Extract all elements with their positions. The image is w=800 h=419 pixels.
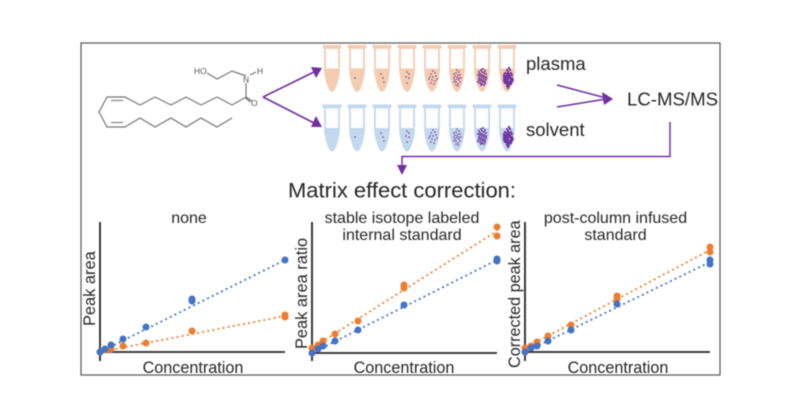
- label: solvent: solvent: [526, 119, 585, 140]
- chart: post-column infused standard: [506, 210, 714, 377]
- plasma tube row: [322, 45, 516, 91]
- label: LC-MS/MS: LC-MS/MS: [627, 88, 718, 110]
- arrow: LC-MS/MS to matrix effect correction: [397, 122, 670, 175]
- chart title: none: none: [171, 210, 207, 227]
- series: orange: [308, 224, 500, 352]
- y axis label: peak area ratio: Peak area ratio: [293, 238, 311, 349]
- series: blue: [96, 256, 288, 356]
- series: orange: [96, 312, 288, 356]
- axes: [525, 222, 710, 361]
- arrow: molecule to plasma tubes: [263, 67, 322, 97]
- icon: lipid molecule structure: N: [243, 74, 249, 84]
- icon: lipid molecule structure: HO: [194, 66, 207, 76]
- x axis label: concentration: Concentration: [143, 359, 243, 377]
- x axis label: concentration: Concentration: [568, 359, 668, 377]
- series: orange: [522, 244, 714, 352]
- axes: [100, 222, 285, 361]
- heading: matrix effect correction: Matrix effect correction:: [288, 180, 516, 202]
- series: blue: [522, 256, 714, 356]
- chart: stable isotope labeled internal standard: [293, 210, 500, 377]
- icon: lipid molecule structure: H: [257, 66, 263, 76]
- arrow: molecule to solvent tubes: [263, 97, 322, 127]
- y axis label: corrected peak area: Corrected peak area: [506, 220, 524, 368]
- label: plasma: plasma: [526, 53, 586, 74]
- series: blue: [308, 256, 500, 356]
- chart: none: [81, 210, 288, 377]
- solvent tube row: [322, 104, 516, 150]
- chart title: post-column infused standard: standard: [584, 227, 647, 244]
- icon: lipid molecule structure: O: [251, 98, 258, 108]
- x axis label: concentration: Concentration: [354, 359, 454, 377]
- chart title: stable isotope labeled internal standard: internal standard: [342, 227, 462, 244]
- chart title: post-column infused standard: post-column infused: [544, 210, 687, 227]
- panel: figure frame: [81, 43, 720, 375]
- chart title: stable isotope labeled internal standard: stable isotope labeled: [325, 210, 479, 227]
- arrow: samples to LC-MS/MS: [557, 85, 613, 107]
- icon: lipid molecule structure: [99, 66, 263, 127]
- axes: [312, 222, 497, 361]
- y axis label: peak area: Peak area: [81, 250, 99, 326]
